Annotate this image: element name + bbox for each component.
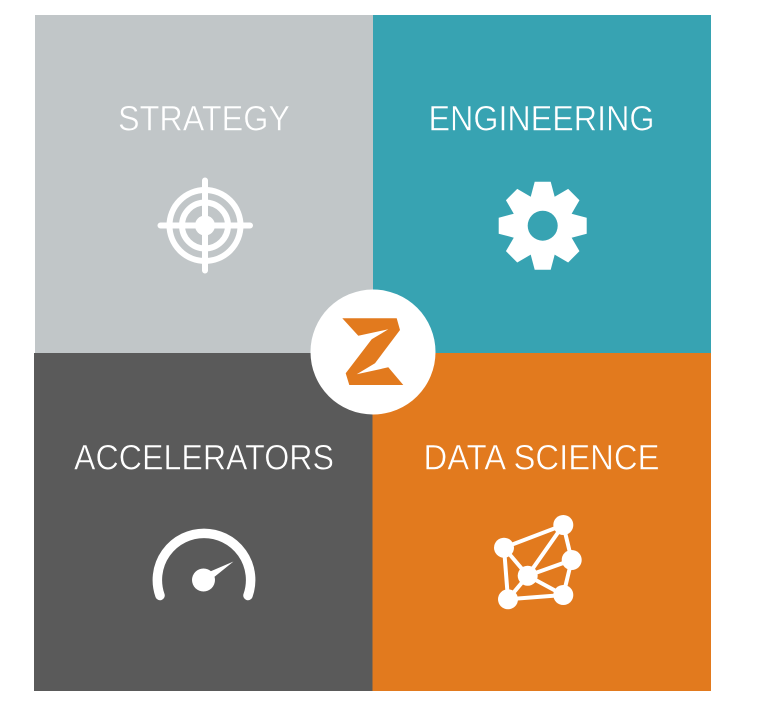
icon: speedometer <box>157 533 251 596</box>
logo: Z badge <box>310 290 436 414</box>
heading: accelerators: ACCELERATORS <box>74 438 334 478</box>
heading: data science: DATA SCIENCE <box>424 438 660 478</box>
icon: target <box>160 180 250 270</box>
panel: strategy <box>35 15 373 353</box>
panel: data science <box>372 353 711 691</box>
panel: accelerators <box>34 353 372 691</box>
icon: gear <box>499 182 587 270</box>
icon: network <box>494 515 582 609</box>
heading: engineering: ENGINEERING <box>428 98 654 138</box>
heading: strategy: STRATEGY <box>118 98 290 138</box>
panel: engineering <box>373 15 711 353</box>
